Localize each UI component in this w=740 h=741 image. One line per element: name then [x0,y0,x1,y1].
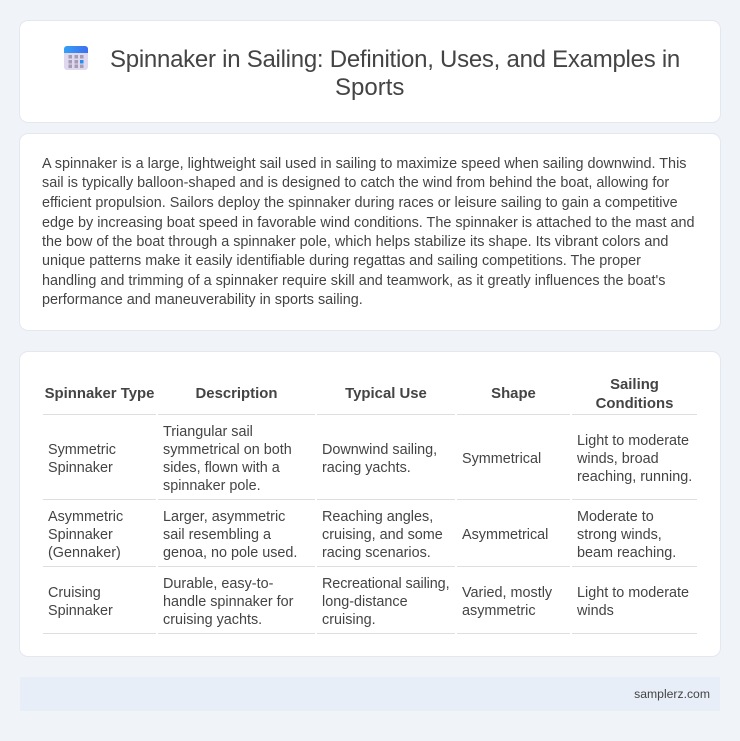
table row: symmetric spinnaker: symmetrical on both [163,442,292,458]
title: Spinnaker in Sailing: Definition, Uses, and Examples in [110,46,680,73]
table row: symmetric spinnaker: spinnaker pole. [163,478,261,494]
title: Sports [335,74,404,101]
table row: cruising spinnaker: Durable, easy-to- [163,576,273,592]
table header row: Conditions [596,396,673,412]
table row: cruising spinnaker: winds [577,603,614,619]
table row: symmetric spinnaker: Symmetrical [462,451,541,467]
table header row [45,377,673,412]
table row: asymmetric spinnaker: Moderate to [577,509,654,525]
panel: intro paragraph [20,134,720,330]
table row: cruising spinnaker [48,576,689,628]
table row: asymmetric spinnaker: Spinnaker [48,527,113,543]
table row: asymmetric spinnaker: strong winds, [577,527,662,543]
text block: spinnaker definition: A spinnaker is a large, lightweight sail used in sailing to maximize speed when sailing downwind. This [42,156,686,172]
table row: cruising spinnaker: Spinnaker [48,603,113,619]
table row: symmetric spinnaker: Downwind sailing, [322,442,437,458]
table row: cruising spinnaker: long-distance [322,594,408,610]
footer bar [20,677,720,711]
text block: spinnaker definition: sail is typically balloon-shaped and is designed to catch the wind from behind the boat, allowing for [42,175,669,191]
table: spinnaker types [43,377,697,634]
footer source: samplerz.com [634,687,710,701]
table row: cruising spinnaker: Recreational sailing, [322,576,450,592]
panel: comparison table [20,352,720,656]
table row: symmetric spinnaker: reaching, running. [577,469,692,485]
table row: asymmetric spinnaker: Reaching angles, [322,509,433,525]
text block: spinnaker definition: unique patterns make it easily identifiable during regattas and sailing competitions. The proper [42,253,641,269]
table header row: Spinnaker Type [45,386,154,402]
table row: asymmetric spinnaker [48,509,676,561]
table row: asymmetric spinnaker: Asymmetric [48,509,123,525]
table row: asymmetric spinnaker: Larger, asymmetric [163,509,285,525]
text block: spinnaker definition: efficient propulsion. Sailors deploy the spinnaker during races or leisure sailing to gain a competitive [42,195,678,211]
table header row: Shape [491,386,536,402]
table row: symmetric spinnaker: Light to moderate [577,433,689,449]
table row: cruising spinnaker: asymmetric [462,603,536,619]
table row: cruising spinnaker: cruising yachts. [163,612,262,628]
table row: symmetric spinnaker: winds, broad [577,451,659,467]
text block: spinnaker definition: performance and maneuverability in sports sailing. [42,292,363,308]
table row: asymmetric spinnaker: racing scenarios. [322,545,431,561]
table row: asymmetric spinnaker: beam reaching. [577,545,676,561]
table row: symmetric spinnaker [48,424,692,494]
table row: symmetric spinnaker: Spinnaker [48,460,113,476]
table row: cruising spinnaker: Cruising [48,585,101,601]
table row: symmetric spinnaker: sides, flown with a [163,460,280,476]
table row: asymmetric spinnaker: genoa, no pole used. [163,545,297,561]
table row: cruising spinnaker: Light to moderate [577,585,689,601]
panel: title header [20,21,720,122]
table header row: Typical Use [345,386,427,402]
text block: spinnaker definition: edge by increasing boat speed in favorable wind conditions. The spinnaker is attached to the mast and [42,215,695,231]
table row: symmetric spinnaker: racing yachts. [322,460,411,476]
table row: asymmetric spinnaker: (Gennaker) [48,545,121,561]
table row: symmetric spinnaker: Triangular sail [163,424,253,440]
title [110,46,680,101]
table row: cruising spinnaker: cruising. [322,612,376,628]
table row: asymmetric spinnaker: cruising, and some [322,527,443,543]
table row: cruising spinnaker: Varied, mostly [462,585,552,601]
text block: spinnaker definition: handling and trimming of a spinnaker require skill and teamwork, as it greatly influences the boat's [42,273,665,289]
table row: asymmetric spinnaker: Asymmetrical [462,527,548,543]
icon: calendar [64,46,88,70]
table header row: Sailing [610,377,659,393]
table row: asymmetric spinnaker: sail resembling a [163,527,271,543]
table row: cruising spinnaker: handle spinnaker for [163,594,293,610]
text block: spinnaker definition [42,156,695,308]
table row: symmetric spinnaker: Symmetric [48,442,116,458]
table header row: Description [196,386,277,402]
text block: spinnaker definition: the bow of the boat through a spinnaker pole, which helps stabilize its shape. Its vibrant colors and [42,234,668,250]
